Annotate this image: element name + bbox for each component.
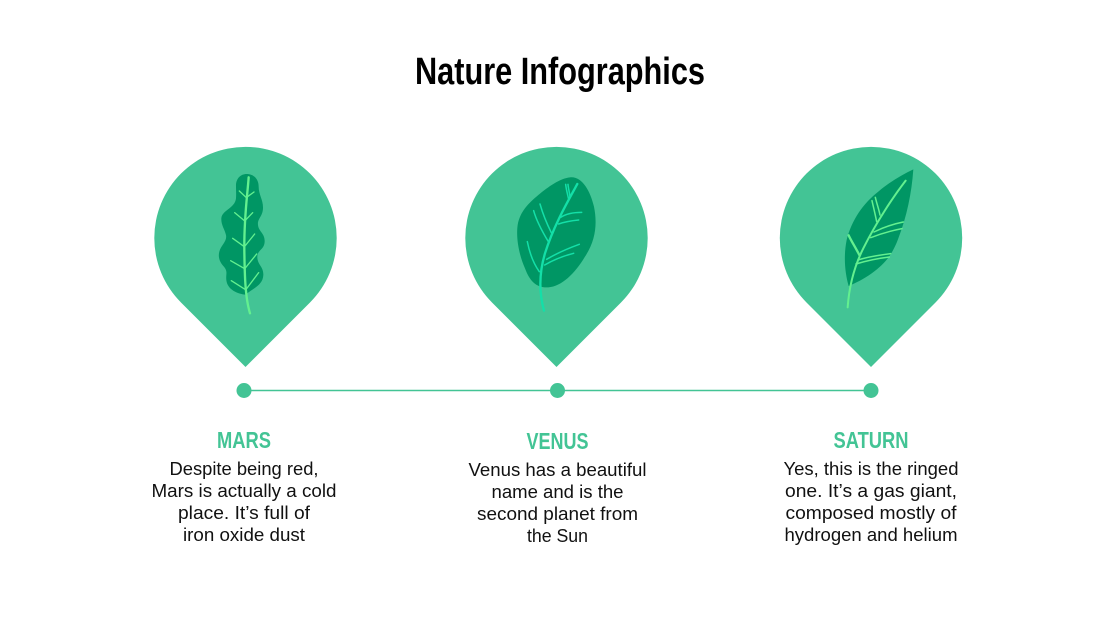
text: Saturn: Yes, this is the ringed bbox=[784, 458, 958, 479]
icon: round leaf bbox=[517, 177, 596, 311]
timeline dot: Venus bbox=[550, 383, 565, 398]
text: Venus: name and is the bbox=[492, 481, 624, 502]
heading: Saturn: SATURN bbox=[834, 427, 908, 453]
text: Venus bbox=[468, 459, 646, 546]
pin: Saturn bbox=[780, 147, 962, 367]
icon: pointed leaf bbox=[845, 169, 913, 307]
pin: Mars bbox=[154, 147, 337, 367]
text: Venus: Venus has a beautiful bbox=[468, 459, 646, 480]
text: Mars: Despite being red, bbox=[170, 458, 318, 479]
title: Nature Infographics bbox=[415, 51, 705, 93]
pin: Venus bbox=[465, 147, 648, 367]
timeline dot: Mars bbox=[236, 383, 252, 398]
text: Venus: second planet from bbox=[477, 503, 638, 524]
text: Saturn: composed mostly of bbox=[786, 502, 957, 523]
text: Mars: Mars is actually a cold bbox=[152, 480, 336, 501]
icon: lobed leaf bbox=[219, 174, 265, 313]
text: Venus: the Sun bbox=[527, 525, 588, 546]
timeline dot: Saturn bbox=[864, 383, 878, 398]
text: Saturn bbox=[784, 458, 958, 545]
text: Saturn: one. It’s a gas giant, bbox=[785, 480, 957, 501]
heading: Venus: VENUS bbox=[526, 428, 588, 454]
timeline bbox=[236, 383, 878, 398]
text: Mars bbox=[152, 458, 336, 545]
text: Mars: iron oxide dust bbox=[183, 524, 305, 545]
heading: Mars: MARS bbox=[217, 427, 271, 453]
text: Saturn: hydrogen and helium bbox=[784, 524, 958, 545]
text: Mars: place. It’s full of bbox=[178, 502, 311, 523]
